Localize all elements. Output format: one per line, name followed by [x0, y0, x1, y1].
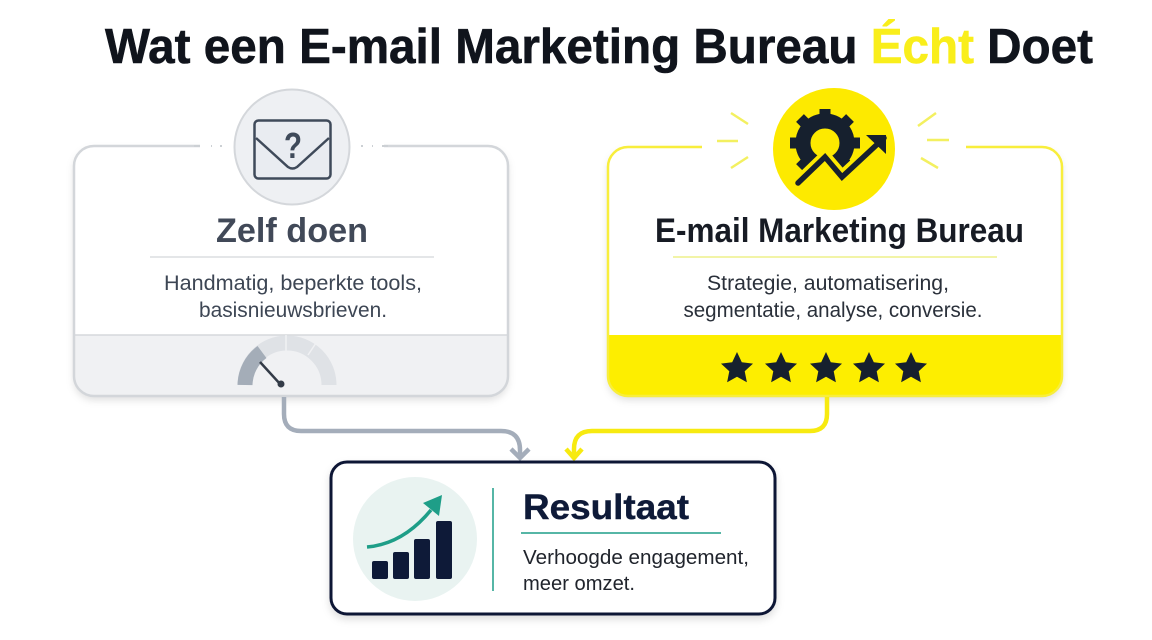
arrow: zelf doen to resultaat	[284, 397, 529, 458]
card frame result	[331, 462, 775, 614]
heading: zelf doen: Zelf doen	[216, 212, 368, 250]
icon: five stars	[721, 352, 927, 382]
icon: low speed gauge	[245, 335, 329, 388]
text: zelf doen description	[164, 272, 422, 322]
panel: e-mail marketing bureau	[608, 88, 1062, 396]
icon: sun rays	[717, 113, 949, 168]
text: resultaat description: Verhoogde engagement,	[523, 547, 749, 569]
panel: resultaat	[331, 462, 775, 614]
title: Wat een E-mail Marketing Bureau Écht Doet	[105, 20, 1093, 74]
text: bureau description: Strategie, automatisering,	[707, 272, 949, 295]
text: resultaat description: meer omzet.	[523, 573, 635, 595]
heading: resultaat: Resultaat	[523, 488, 689, 527]
heading: e-mail marketing bureau: E-mail Marketing Bureau	[655, 212, 1024, 250]
icon: growth bar chart	[353, 477, 477, 601]
text: zelf doen description: Handmatig, beperkte tools,	[164, 272, 422, 295]
text: bureau description	[684, 272, 982, 322]
text: resultaat description	[523, 547, 749, 595]
panel: zelf doen	[74, 90, 508, 396]
icon: gear with rising arrow	[773, 88, 895, 210]
icon: envelope with question mark: ?	[284, 125, 302, 166]
card frame left	[74, 140, 508, 396]
icon: envelope with question mark	[234, 90, 350, 204]
card frame right	[608, 140, 1062, 396]
text: zelf doen description: basisnieuwsbrieven.	[199, 299, 387, 322]
text: bureau description: segmentatie, analyse, conversie.	[684, 299, 982, 322]
arrow: bureau to resultaat	[566, 397, 827, 458]
